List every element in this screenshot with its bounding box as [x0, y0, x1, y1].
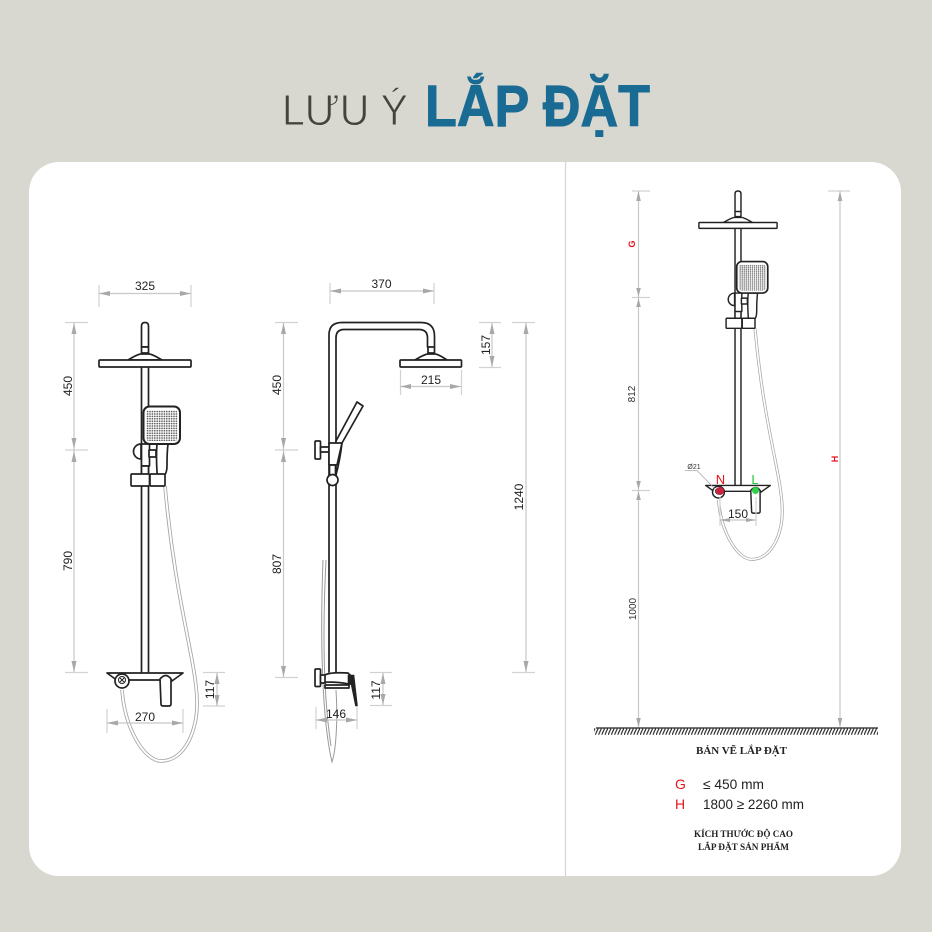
panel: installation drawing: [594, 191, 878, 853]
panel: drawing card: [29, 162, 901, 876]
height legend: G: [675, 776, 686, 792]
dimension 150: 150: [728, 507, 748, 521]
dimension 370: 370: [371, 277, 392, 291]
heading: installation drawing: BẢN VẼ LẮP ĐẶT: [696, 744, 787, 757]
dimension 1240: [512, 322, 535, 672]
diameter label: [685, 464, 715, 489]
dimension G, 812, 1000: G: [627, 240, 637, 248]
dimension G, 812, 1000: [627, 191, 650, 727]
dimension 450 and 790: 450: [61, 376, 75, 396]
mixer valve: [107, 673, 183, 706]
dimension 450 and 807: [270, 322, 298, 678]
hand shower: [144, 406, 180, 476]
dimension 325: 325: [135, 279, 155, 293]
caption: product height: LẮP ĐẶT SẢN PHẨM: [698, 840, 789, 853]
slider: [131, 474, 165, 486]
bracket: [134, 444, 156, 475]
dimension 117: 117: [203, 680, 217, 699]
hose: [122, 486, 197, 761]
dimension 117 side: 117: [369, 680, 383, 700]
hot water marker N: N: [716, 472, 725, 487]
dimension 146: [316, 707, 357, 729]
dimension 325: [99, 279, 191, 307]
dimension 270: [107, 709, 183, 733]
cold water marker L: [751, 472, 759, 494]
title: [282, 74, 650, 139]
dimension 450 and 790: 790: [61, 551, 75, 571]
height legend: ≤ 450 mm: [703, 776, 764, 792]
rail: [142, 367, 148, 672]
shower front view: [99, 322, 197, 761]
dimension 1240: 1240: [512, 483, 526, 510]
dimension 146: 146: [326, 707, 346, 721]
dimension 117: [203, 672, 225, 706]
dimension 157: 157: [479, 335, 493, 355]
dimension 450 and 807: 807: [270, 554, 284, 574]
dimension 450 and 790: [61, 322, 88, 672]
dimension 157: [479, 322, 501, 368]
side mixer valve: [315, 669, 358, 706]
caption: product height: KÍCH THƯỚC ĐỘ CAO: [694, 827, 793, 840]
height legend: [675, 776, 804, 812]
side shower head: [400, 347, 462, 367]
caption: product height: [694, 827, 793, 853]
shower side view: [315, 322, 462, 762]
dimension 215: [400, 370, 462, 395]
dimension 370: [330, 277, 434, 304]
shower installed: [699, 191, 782, 559]
height legend: 1800 ≥ 2260 mm: [703, 796, 804, 812]
title: light part: LƯU Ý: [282, 86, 408, 135]
panel: side view drawing: [270, 277, 535, 762]
dimension 150: [720, 497, 756, 526]
overhead pipe: [329, 322, 434, 672]
dimension 450 and 807: 450: [270, 375, 284, 395]
dimension H: [828, 191, 850, 727]
floor line: [594, 728, 878, 735]
side hose: [322, 560, 337, 762]
dimension H: H: [830, 456, 840, 462]
top stem and shower head: [99, 322, 191, 367]
dimension G, 812, 1000: 812: [627, 385, 638, 402]
title: bold part: LẮP ĐẶT: [425, 74, 650, 139]
panel: front view drawing: [61, 279, 225, 761]
dimension 215: 215: [421, 373, 441, 387]
dimension 270: 270: [135, 710, 155, 724]
dimension 117 side: [369, 672, 392, 706]
diameter label: Ø21: [687, 464, 701, 471]
height legend: H: [675, 796, 685, 812]
dimension G, 812, 1000: 1000: [628, 597, 639, 620]
side hand shower: [315, 402, 363, 486]
cold water marker L: L: [751, 472, 759, 487]
hot water marker N: [716, 472, 725, 495]
